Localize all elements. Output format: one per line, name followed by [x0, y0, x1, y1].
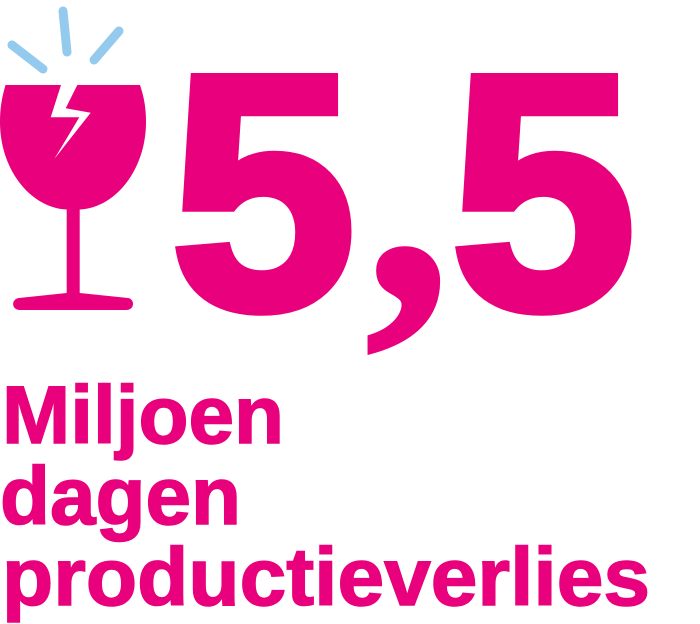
second digit 5: 5: [450, 5, 636, 379]
icon: broken wine glass: [0, 11, 146, 310]
caption line 3: productieverlies: [2, 532, 650, 623]
comma: ,: [365, 0, 451, 374]
caption line 1: Miljoen: [2, 370, 284, 461]
first digit 5: 5: [170, 5, 356, 379]
caption line 2: dagen: [0, 451, 241, 542]
icon: glass bowl and foot: [0, 85, 146, 310]
icon: blue shards: [12, 11, 119, 69]
caption: Miljoen dagen productieverlies: [0, 370, 650, 623]
big number 5,5: [170, 0, 636, 379]
